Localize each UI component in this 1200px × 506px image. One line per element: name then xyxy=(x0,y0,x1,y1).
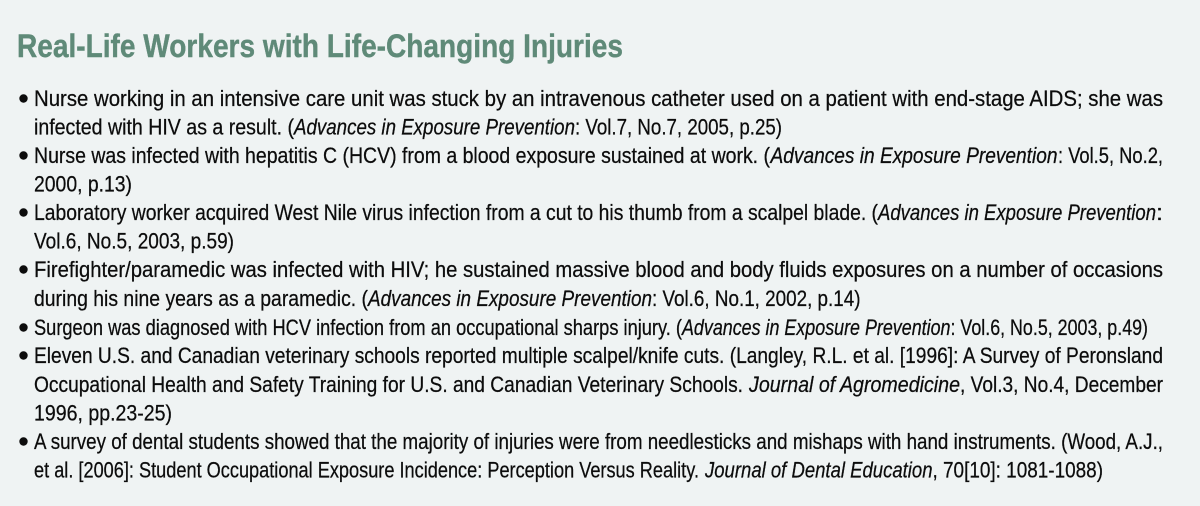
list item: veterinary schools xyxy=(19,343,1163,426)
list item: dental students survey: et al. [2006]: Student Occupational Exposure Incidence: Perception Versus Reality. xyxy=(34,458,699,482)
title: Real-Life Workers with Life-Changing Injuries xyxy=(17,28,623,64)
list item: nurse hepatitis C: 2000, p.13) xyxy=(34,172,132,196)
list item: firefighter/paramedic HIV: Advances in Exposure Prevention xyxy=(366,286,652,311)
list item: firefighter/paramedic HIV: : Vol.6, No.1, 2002, p.14) xyxy=(652,286,860,311)
list item: surgeon HCV: Surgeon was diagnosed with HCV infection from an occupational sharps injury. ( xyxy=(34,315,682,340)
list item: ICU nurse HIV: Advances in Exposure Prevention xyxy=(292,114,575,140)
list item: firefighter/paramedic HIV xyxy=(19,257,1163,311)
list item: dental students survey: , 70[10]: 1081-1088) xyxy=(932,458,1103,482)
panel: list of injury cases xyxy=(19,86,1163,482)
list item: laboratory worker West Nile virus: Vol.6, No.5, 2003, p.59) xyxy=(34,228,234,254)
list item: dental students survey xyxy=(19,429,1163,482)
list item: nurse hepatitis C: : Vol.5, No.2, xyxy=(1058,143,1163,168)
list item: ICU nurse HIV: : Vol.7, No.7, 2005, p.25) xyxy=(575,114,782,140)
list item: nurse hepatitis C: Nurse was infected with hepatitis C (HCV) from a blood exposure sustained at work. ( xyxy=(34,143,770,168)
list item: dental students survey: Journal of Dental Education xyxy=(704,458,932,482)
list item: ICU nurse HIV xyxy=(19,86,1163,140)
list item: laboratory worker West Nile virus: Laboratory worker acquired West Nile virus infection from a cut to his thumb from a scalpel blade. ( xyxy=(34,200,878,225)
list item: ICU nurse HIV: infected with HIV as a result. ( xyxy=(34,114,294,140)
list item: veterinary schools: Journal of Agromedicine xyxy=(748,372,960,397)
list item: firefighter/paramedic HIV: during his nine years as a paramedic. ( xyxy=(34,286,368,311)
list item: surgeon HCV: Advances in Exposure Prevention xyxy=(680,315,950,340)
list item: laboratory worker West Nile virus xyxy=(19,200,1163,254)
list item: surgeon HCV: : Vol.6, No.5, 2003, p.49) xyxy=(950,315,1148,340)
list item: laboratory worker West Nile virus: : xyxy=(1156,200,1163,225)
list item: nurse hepatitis C: Advances in Exposure Prevention xyxy=(769,143,1058,168)
list item: veterinary schools: Occupational Health and Safety Training for U.S. and Canadian Veterinary Schools. xyxy=(34,372,743,397)
list item: veterinary schools: , Vol.3, No.4, December xyxy=(960,372,1163,397)
list item: veterinary schools: 1996, pp.23-25) xyxy=(34,400,172,426)
list item: nurse hepatitis C xyxy=(19,143,1163,196)
